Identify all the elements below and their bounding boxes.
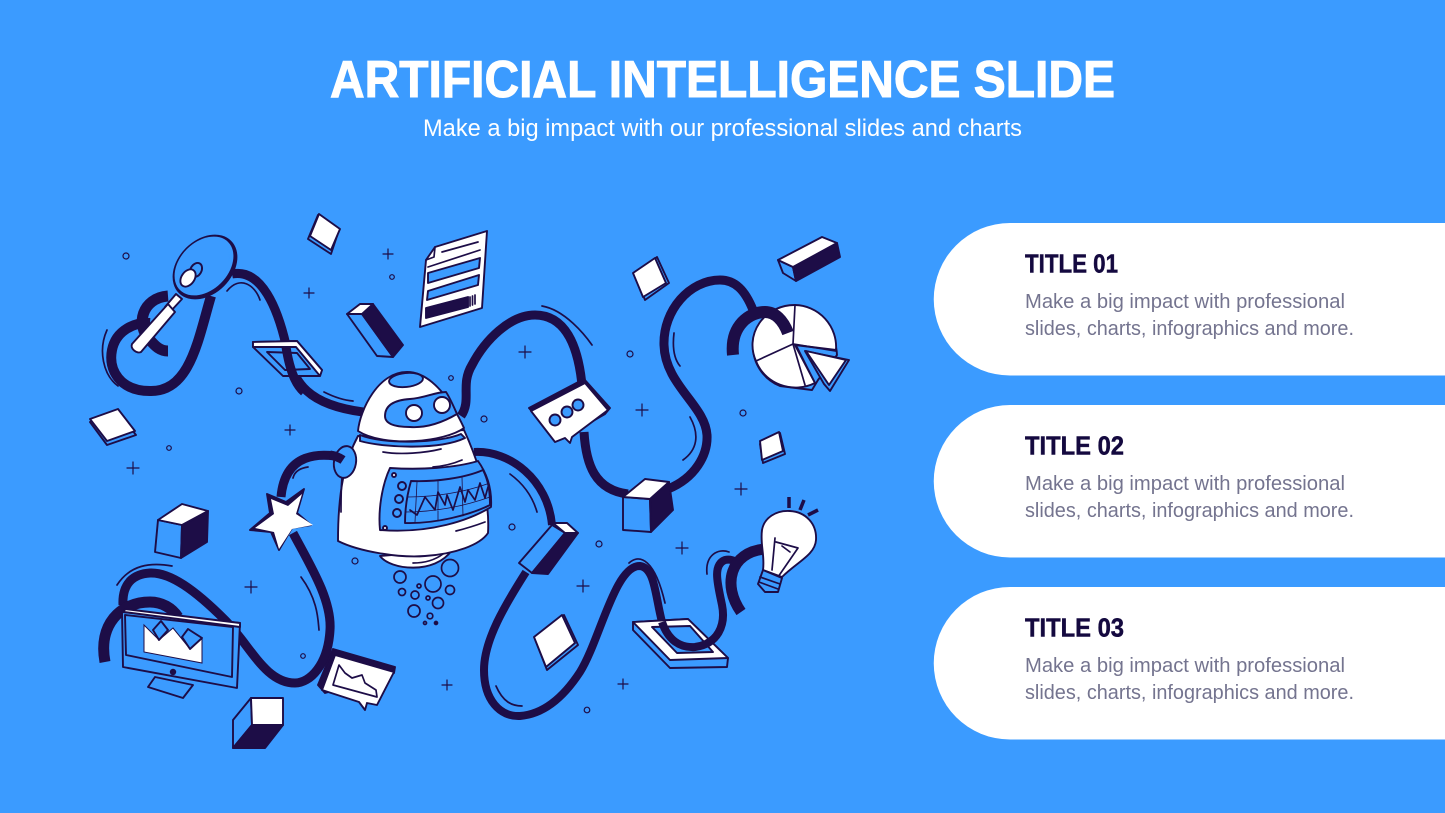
icon: navy block top right <box>778 237 840 281</box>
icon: white tile upper right <box>633 257 669 300</box>
icon: document <box>420 231 487 327</box>
icon: cube left <box>155 504 208 558</box>
text: title 01 description: Make a big impact with professional <box>1025 291 1345 313</box>
exhaust bubbles <box>394 560 458 624</box>
icon: white tile top <box>308 214 340 254</box>
text: title 02 description: Make a big impact with professional <box>1025 473 1345 495</box>
icon: magnifying glass <box>132 222 250 352</box>
heading: title 02: TITLE 02 <box>1025 430 1124 460</box>
illustration: AI robot network <box>90 214 849 748</box>
heading: title 01: TITLE 01 <box>1025 248 1118 278</box>
text: title 02 description: slides, charts, infographics and more. <box>1025 500 1354 522</box>
icon: navy block on cable <box>519 523 578 574</box>
icon: cube centre <box>623 479 673 532</box>
robot shoulder <box>331 444 359 480</box>
robot <box>330 371 491 568</box>
panel: title 02 <box>934 405 1445 558</box>
thin accent lines <box>103 283 729 706</box>
icon: light bulb <box>731 497 818 612</box>
background sparkles <box>123 249 747 713</box>
panel: title 01 <box>934 223 1445 376</box>
icon: tablet frame on cable <box>633 560 737 668</box>
robot lower dome <box>380 550 452 568</box>
icon: chart speech bubble <box>318 649 395 710</box>
title: ARTIFICIAL INTELLIGENCE SLIDE <box>330 51 1115 109</box>
robot chest panel <box>379 461 491 531</box>
robot head <box>358 372 464 441</box>
text: title 03 description: Make a big impact with professional <box>1025 655 1345 677</box>
icon: navy block upper <box>347 304 403 357</box>
icon: monitor <box>104 602 240 698</box>
icon: white tile small right <box>760 432 785 463</box>
icon: cube bottom <box>233 698 283 748</box>
icon: pie chart <box>733 305 849 391</box>
text: title 01 description: slides, charts, infographics and more. <box>1025 318 1354 340</box>
text: title 02 description <box>1025 473 1354 522</box>
panel: title 03 <box>934 587 1445 740</box>
robot body <box>338 430 488 556</box>
icon: white tile left <box>90 409 136 445</box>
text: title 01 description <box>1025 291 1354 340</box>
thick cables <box>111 273 753 716</box>
text: title 03 description: slides, charts, infographics and more. <box>1025 682 1354 704</box>
icon: square frame on cable <box>253 341 322 392</box>
icon: star <box>250 489 313 550</box>
icon: chat bubble with dots <box>529 379 610 443</box>
heading: title 03: TITLE 03 <box>1025 612 1124 642</box>
subtitle: Make a big impact with our professional slides and charts <box>423 115 1022 142</box>
text: title 03 description <box>1025 655 1354 704</box>
icon: white tile lower centre <box>534 615 578 670</box>
